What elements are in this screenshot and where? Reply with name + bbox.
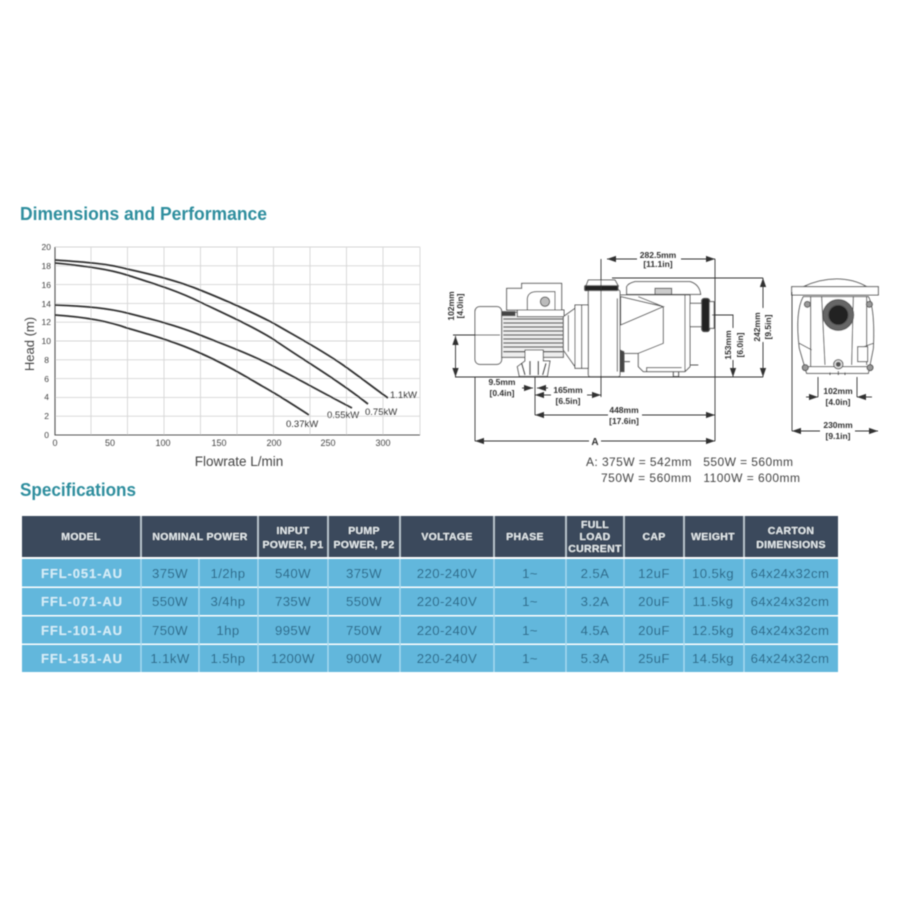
x axis tick labels: 0 xyxy=(52,438,58,448)
row: FFL-051-AU: 10.5kg xyxy=(692,566,734,581)
y axis tick labels xyxy=(42,242,51,440)
table header row: PHASE xyxy=(506,531,544,543)
dimension labels: front view: 230mm xyxy=(823,420,853,430)
dimension labels: side view: 153mm xyxy=(723,330,733,360)
row: FFL-051-AU: 12uF xyxy=(638,566,670,581)
table header row: POWER, P1 xyxy=(262,539,324,551)
row: FFL-051-AU xyxy=(152,566,829,581)
model column: FFL-101-AU xyxy=(41,623,123,638)
y axis tick labels: 16 xyxy=(42,280,51,290)
row: FFL-051-AU: 375W xyxy=(152,566,188,581)
specifications table xyxy=(22,516,838,672)
row: FFL-151-AU: 1~ xyxy=(522,651,538,666)
table header row: FULL xyxy=(581,519,609,531)
outlet port xyxy=(823,300,854,330)
terminal box xyxy=(507,283,562,310)
diffuser shape xyxy=(621,297,663,325)
row: FFL-051-AU: 64x24x32cm xyxy=(751,566,829,581)
dimension labels: side view: [17.6in] xyxy=(609,416,639,426)
pump front view diagram xyxy=(792,279,878,375)
curve: 0.75kW xyxy=(55,263,368,404)
y axis tick labels: 8 xyxy=(44,355,49,365)
dimension labels: side view: [0.4in] xyxy=(489,388,515,398)
curve labels xyxy=(286,390,417,430)
x axis tick labels: 150 xyxy=(211,438,227,448)
y axis tick labels: 6 xyxy=(44,374,49,384)
x axis tick labels: 50 xyxy=(105,438,115,448)
row: FFL-071-AU: 735W xyxy=(275,594,311,609)
row: FFL-101-AU: 4.5A xyxy=(581,623,609,638)
dimension labels: front view: [9.1in] xyxy=(825,431,851,441)
y axis tick labels: 18 xyxy=(42,261,51,271)
model column: FFL-151-AU xyxy=(41,651,123,666)
volute xyxy=(588,290,620,377)
y axis tick labels: 4 xyxy=(44,392,49,402)
row: FFL-071-AU: 1~ xyxy=(522,594,538,609)
row: FFL-071-AU: 20uF xyxy=(638,594,670,609)
curve: 0.37kW xyxy=(55,315,309,415)
row: FFL-151-AU: 25uF xyxy=(638,651,670,666)
dimension labels: front view xyxy=(823,386,853,441)
dimension labels: side view: 102mm xyxy=(446,291,456,321)
curve labels: 0.75kW xyxy=(365,407,397,418)
row: FFL-051-AU: 375W xyxy=(346,566,382,581)
heading: Specifications: Specifications xyxy=(20,480,136,500)
model column: FFL-051-AU xyxy=(41,566,123,581)
model column xyxy=(41,566,123,666)
table body background xyxy=(22,559,838,672)
x axis tick labels: 100 xyxy=(155,438,171,448)
x axis tick labels: 200 xyxy=(266,438,282,448)
row: FFL-071-AU: 3.2A xyxy=(581,594,609,609)
row: FFL-151-AU: 1200W xyxy=(271,651,315,666)
dimension lines: front view xyxy=(792,292,878,431)
row: FFL-071-AU: 550W xyxy=(346,594,382,609)
table header row: CURRENT xyxy=(568,543,622,555)
model length note: 750W = 560mm 1100W = 600mm xyxy=(601,471,800,485)
row: FFL-101-AU: 1~ xyxy=(522,623,538,638)
row: FFL-101-AU: 750W xyxy=(152,623,188,638)
curve labels: 0.55kW xyxy=(327,410,359,421)
dimension labels: front view: [4.0in] xyxy=(825,397,851,407)
dimension labels: side view: 282.5mm xyxy=(640,250,677,260)
row: FFL-071-AU: 64x24x32cm xyxy=(751,594,829,609)
dimension lines: side view xyxy=(453,259,763,441)
row: FFL-051-AU: 1/2hp xyxy=(210,566,246,581)
motor end cap xyxy=(475,307,502,364)
row: FFL-151-AU: 1.5hp xyxy=(210,651,246,666)
dimension labels: front view: 102mm xyxy=(823,386,853,396)
motor body xyxy=(502,312,563,357)
x axis tick labels: 300 xyxy=(375,438,391,448)
y axis tick labels: 0 xyxy=(44,430,49,440)
curve: 1.1kW xyxy=(55,260,388,398)
model column: FFL-071-AU xyxy=(41,594,123,609)
body xyxy=(798,297,874,373)
strainer body xyxy=(620,295,690,372)
row: FFL-101-AU: 220-240V xyxy=(417,623,477,638)
dimension labels: side view: 448mm xyxy=(609,405,639,415)
pump side view diagram xyxy=(475,280,714,377)
table header row: MODEL xyxy=(61,531,101,543)
dimension labels: side view: [11.1in] xyxy=(643,259,673,269)
dimension labels: side view: [4.0in] xyxy=(455,293,465,319)
row: FFL-051-AU: 220-240V xyxy=(417,566,477,581)
table header row: POWER, P2 xyxy=(333,539,395,551)
row: FFL-151-AU: 1.1kW xyxy=(150,651,190,666)
dimension labels: side view: 9.5mm xyxy=(489,377,516,387)
row: FFL-151-AU xyxy=(150,651,829,666)
table header row: CAP xyxy=(642,531,666,543)
row: FFL-071-AU xyxy=(152,594,829,609)
y axis tick labels: 20 xyxy=(42,242,51,252)
dimension labels: side view: [6.5in] xyxy=(555,396,581,406)
dimension labels: side view: 165mm xyxy=(553,385,583,395)
dimension labels: side view: 242mm xyxy=(752,312,762,342)
row: FFL-051-AU: 540W xyxy=(275,566,311,581)
row: FFL-101-AU: 20uF xyxy=(638,623,670,638)
row: FFL-101-AU: 1hp xyxy=(216,623,240,638)
table header row: CARTON xyxy=(768,525,814,537)
row: FFL-051-AU: 1~ xyxy=(522,566,538,581)
row: FFL-071-AU: 3/4hp xyxy=(210,594,246,609)
strainer lid xyxy=(627,282,701,294)
y axis tick labels: 12 xyxy=(42,317,51,327)
performance chart xyxy=(22,242,420,469)
dimension labels: side view xyxy=(446,250,773,448)
table header row: PUMP xyxy=(348,525,380,537)
row: FFL-101-AU: 995W xyxy=(275,623,311,638)
x axis title: Flowrate L/min xyxy=(195,454,283,469)
x axis tick labels: 250 xyxy=(320,438,336,448)
row: FFL-101-AU: 64x24x32cm xyxy=(751,623,829,638)
table header row: VOLTAGE xyxy=(421,531,473,543)
y axis tick labels: 14 xyxy=(42,299,51,309)
row: FFL-101-AU: 12.5kg xyxy=(692,623,734,638)
outlet xyxy=(690,303,702,327)
row: FFL-071-AU: 11.5kg xyxy=(692,594,734,609)
curve: 0.55kW xyxy=(55,305,352,408)
y axis title: Head (m) xyxy=(22,317,37,371)
row: FFL-151-AU: 64x24x32cm xyxy=(751,651,829,666)
row: FFL-071-AU: 220-240V xyxy=(417,594,477,609)
row: FFL-151-AU: 900W xyxy=(346,651,382,666)
row: FFL-151-AU: 5.3A xyxy=(581,651,609,666)
lid xyxy=(803,279,867,287)
row: FFL-051-AU: 2.5A xyxy=(581,566,609,581)
table header row xyxy=(22,516,838,557)
row: FFL-101-AU xyxy=(152,623,829,638)
dimension labels: side view: [6.0in] xyxy=(735,332,745,358)
row: FFL-151-AU: 14.5kg xyxy=(692,651,734,666)
model length note: A: 375W = 542mm 550W = 560mm xyxy=(586,455,793,469)
inlet cap xyxy=(586,280,618,286)
table header row: NOMINAL POWER xyxy=(152,531,248,543)
table header row: WEIGHT xyxy=(691,531,735,543)
heading: Dimensions and Performance: Dimensions and Performance xyxy=(20,204,267,224)
table header row: INPUT xyxy=(276,525,310,537)
dimension labels: side view: [9.5in] xyxy=(763,314,773,340)
model length note xyxy=(586,455,800,485)
curve labels: 1.1kW xyxy=(390,390,417,401)
neck xyxy=(563,308,575,367)
row: FFL-151-AU: 220-240V xyxy=(417,651,477,666)
table header row: DIMENSIONS xyxy=(756,539,826,551)
row: FFL-101-AU: 750W xyxy=(346,623,382,638)
table header row: LOAD xyxy=(580,531,611,543)
dimension labels: side view: A xyxy=(591,437,599,448)
y axis tick labels: 10 xyxy=(42,336,51,346)
motor foot xyxy=(517,350,550,376)
curve labels: 0.37kW xyxy=(286,419,318,430)
x axis tick labels xyxy=(52,438,391,448)
drain plug xyxy=(834,360,843,369)
y axis tick labels: 2 xyxy=(44,411,49,421)
row: FFL-071-AU: 550W xyxy=(152,594,188,609)
